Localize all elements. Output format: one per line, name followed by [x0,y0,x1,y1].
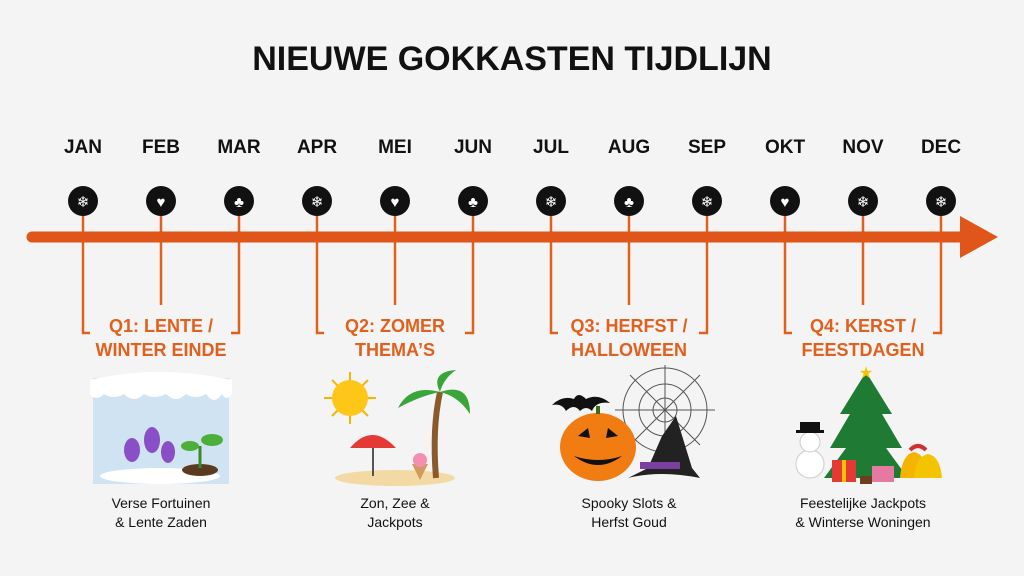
quarter headings: Q1: LENTE / [109,316,213,336]
quarter headings: THEMA’S [355,340,435,360]
quarter headings: Q3: HERFST / [570,316,688,336]
connector lines [83,210,941,333]
month labels [64,137,961,158]
quarter headings [95,316,925,360]
month labels: DEC [921,137,961,158]
month icons: ❄ [545,194,557,211]
illustration: Q4 christmas [796,365,942,484]
illustration: Q1 winter spring [90,372,232,484]
month labels: JUL [533,137,569,158]
month labels: MAR [217,137,261,158]
month icons: ❄ [77,194,89,211]
month labels: FEB [142,137,180,158]
illustration: Q4 christmas: ★ [859,365,873,382]
captions: & Lente Zaden [115,514,207,530]
quarter headings: Q2: ZOMER [345,316,445,336]
month icons: ♥ [391,194,400,211]
captions: Jackpots [367,514,423,530]
captions: Zon, Zee & [360,495,430,511]
month icons: ♣ [234,194,244,211]
timeline arrow [32,216,998,258]
month icons: ♣ [468,194,478,211]
captions: Herfst Goud [591,514,667,530]
quarter headings: FEESTDAGEN [801,340,925,360]
captions: Feestelijke Jackpots [800,495,926,511]
month labels: SEP [688,137,726,158]
month icons: ❄ [935,194,947,211]
month labels: MEI [378,137,412,158]
month labels: AUG [608,137,650,158]
title: NIEUWE GOKKASTEN TIJDLIJN [252,40,772,78]
month icons: ❄ [701,194,713,211]
quarter headings: HALLOWEEN [571,340,687,360]
illustration: Q2 summer [324,370,470,486]
illustration: Q3 halloween [552,365,715,481]
month labels: JAN [64,137,102,158]
month icons: ♣ [624,194,634,211]
captions: Verse Fortuinen [112,495,210,511]
captions [112,495,931,530]
captions: Spooky Slots & [582,495,677,511]
captions: & Winterse Woningen [795,514,931,530]
month labels: APR [297,137,337,158]
month labels: NOV [842,137,884,158]
month icons: ❄ [311,194,323,211]
month icons: ♥ [157,194,166,211]
month icons: ❄ [857,194,869,211]
quarter headings: Q4: KERST / [810,316,916,336]
month labels: OKT [765,137,805,158]
quarter headings: WINTER EINDE [95,340,227,360]
month labels: JUN [454,137,492,158]
month icons: ♥ [781,194,790,211]
month icons [68,186,956,216]
